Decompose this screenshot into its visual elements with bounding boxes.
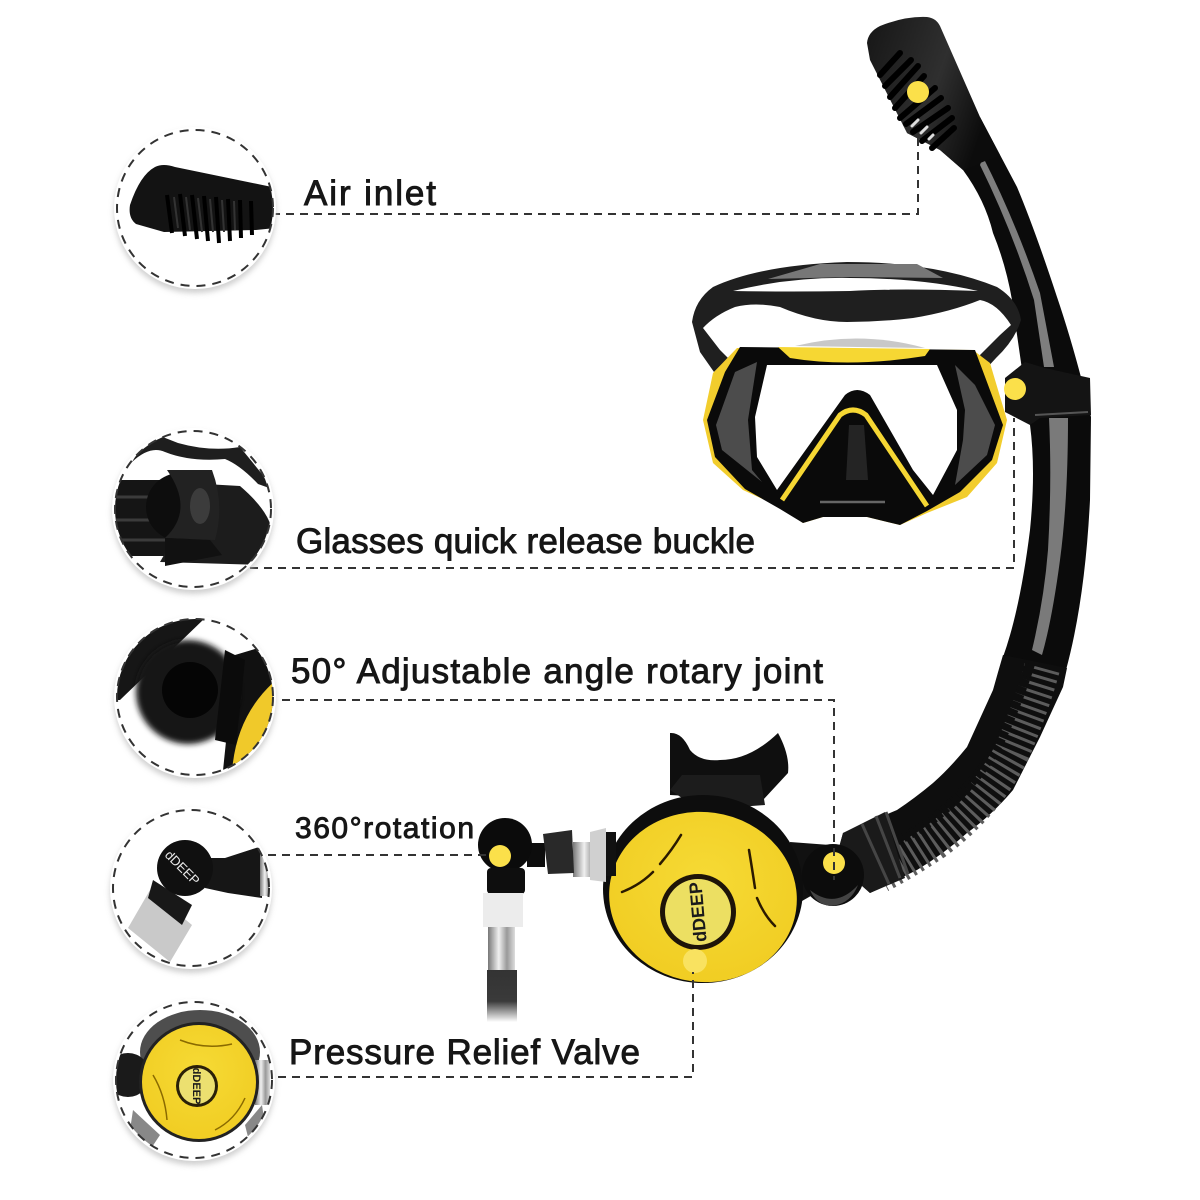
regulator (598, 733, 864, 994)
strap grey highlight (768, 264, 943, 279)
rear housing (140, 1010, 260, 1060)
regulator side arm (790, 842, 830, 905)
black nut (205, 848, 262, 898)
infographic canvas (108, 16, 1091, 1168)
silver fitting (573, 842, 601, 877)
snorkel base connector (835, 812, 905, 893)
buckle disc (146, 474, 180, 538)
silver end (260, 854, 269, 896)
mask strap (692, 262, 1021, 372)
snorkel (835, 17, 1091, 893)
marker: quick release buckle (1004, 378, 1026, 400)
silver hex (128, 890, 192, 962)
right housing (223, 649, 273, 770)
mask top yellow band (778, 347, 930, 363)
lower lobes (130, 1105, 264, 1146)
leader line: pressure relief valve (278, 972, 693, 1077)
inlet slits (167, 194, 252, 243)
label: pressure relief valve: Pressure Relief Valve (289, 1033, 640, 1072)
pressure relief valve marker (683, 949, 707, 973)
label: rotary joint: 50° Adjustable angle rotary joint (291, 652, 823, 691)
detail circle: 360 rotation (110, 807, 272, 973)
swivel marker (489, 845, 511, 867)
yellow cover crescent (232, 684, 273, 764)
diving mask (692, 262, 1021, 525)
lower clamp (165, 538, 222, 566)
hose section (117, 619, 203, 700)
tube segment (115, 480, 167, 556)
mask black frame (707, 347, 1003, 525)
mouthpiece (670, 733, 788, 800)
disc logo button (176, 1065, 218, 1107)
detail circle: quick release buckle (110, 428, 275, 594)
snorkel ball joint (802, 844, 864, 906)
inlet head shape (130, 165, 275, 232)
right fitting (255, 1060, 270, 1105)
upper tube highlight (980, 157, 1054, 367)
strap slit (733, 278, 978, 292)
detail circle: air inlet (114, 127, 276, 293)
side lens left (716, 362, 762, 482)
corrugated flexible hose (835, 655, 1067, 893)
nose yellow trim (782, 410, 927, 506)
snorkel mask clip (1005, 362, 1091, 425)
label: 360 rotation: 360°rotation (295, 812, 474, 845)
regulator yellow cover (598, 800, 808, 994)
left ball (116, 1053, 144, 1097)
strap above buckle (132, 437, 267, 488)
cover slits (622, 835, 775, 926)
nose pocket highlight (846, 425, 868, 480)
regulator neck (670, 775, 765, 810)
regulator black housing (603, 795, 803, 983)
disc slits (153, 1040, 245, 1130)
yellow disc (139, 1022, 259, 1142)
leader line: 360 rotation (268, 854, 490, 856)
mask top accent (795, 338, 925, 348)
detail circle: pressure relief valve: dDEEP (190, 1068, 202, 1104)
label: air inlet: Air inlet (304, 174, 436, 213)
joint ball (136, 640, 240, 744)
leader line: rotary joint (282, 700, 834, 880)
marker: air inlet (907, 81, 929, 103)
black nut (543, 830, 574, 874)
detail circle: rotary joint (112, 618, 278, 784)
leader line: air inlet (272, 135, 918, 214)
second stage swivel adapter (478, 818, 616, 1022)
cover logo button: dDEEP (685, 881, 711, 943)
detail circle: pressure relief valve (106, 999, 275, 1165)
hose ribs (880, 668, 1042, 875)
mask clear lens (755, 365, 957, 495)
silver hex (483, 893, 523, 927)
cover logo button (660, 874, 736, 950)
joint marker (823, 852, 845, 874)
detail circle: 360 rotation: dDEEP (162, 847, 203, 888)
swivel ball (478, 818, 532, 872)
leader line: quick release buckle (250, 418, 1014, 568)
side lens right (955, 365, 995, 485)
snorkel breathing tube (907, 117, 1091, 670)
air hose (487, 970, 517, 1022)
buckle lobe (160, 484, 272, 565)
lower black ferrule (487, 868, 525, 894)
swivel ball (157, 840, 213, 896)
mask yellow rim (703, 348, 1007, 525)
black neck (527, 843, 545, 867)
black ferrule (148, 880, 192, 925)
snorkel air inlet head (867, 17, 1000, 170)
air inlet slots (880, 53, 954, 148)
label: quick release buckle: Glasses quick release buckle (296, 522, 755, 561)
lower tube highlight (1032, 418, 1068, 655)
